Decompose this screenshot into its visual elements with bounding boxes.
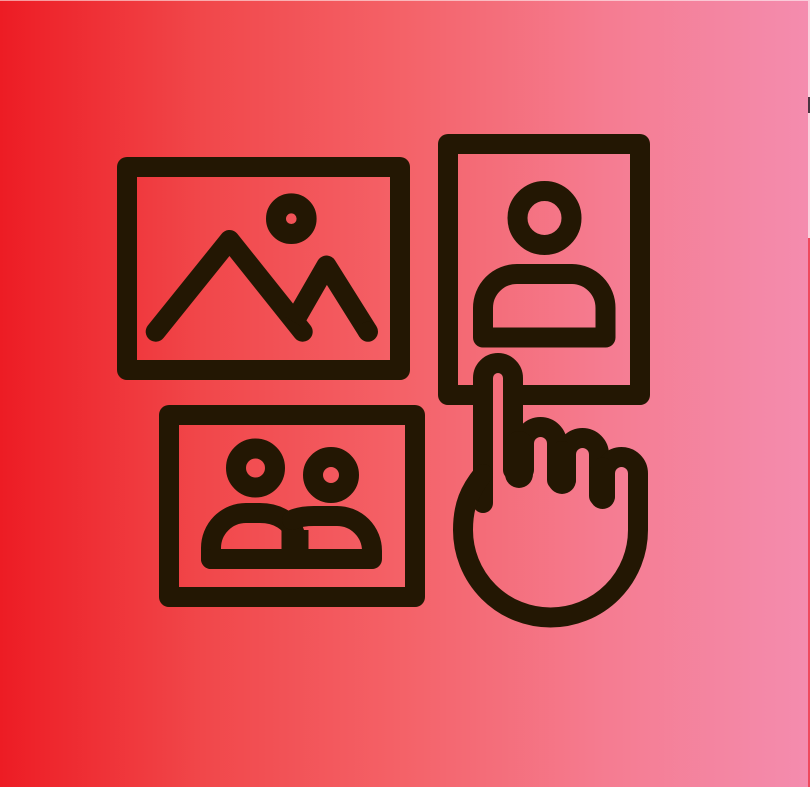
landscape photo frame xyxy=(127,167,400,370)
right edge strip: pale section xyxy=(808,0,810,238)
top edge highlight xyxy=(0,0,810,1)
right edge strip: dark block xyxy=(808,97,810,113)
group photo frame xyxy=(169,415,415,597)
icon artwork xyxy=(127,144,640,618)
right edge strip: red section xyxy=(808,238,810,787)
finger tips xyxy=(505,445,533,474)
portrait photo frame xyxy=(448,144,640,395)
pointing hand xyxy=(463,363,638,618)
